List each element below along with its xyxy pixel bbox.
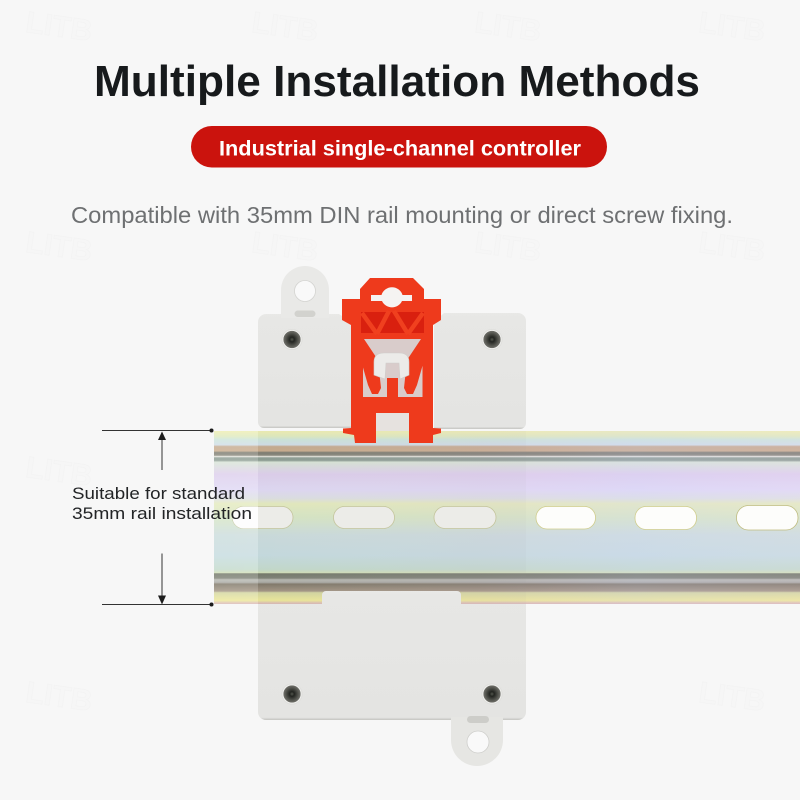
DIN rail [214, 431, 800, 604]
clip keyhole [371, 287, 412, 307]
dimension label: 35mm rail installation [72, 505, 252, 523]
badge: product type [191, 126, 607, 168]
clip white latch [374, 353, 409, 379]
rail slot 1 [232, 506, 293, 528]
badge: product type: Industrial single-channel controller [219, 136, 582, 160]
subtitle: Compatible with 35mm DIN rail mounting or direct screw fixing. [71, 202, 733, 228]
controller: lower housing [258, 591, 526, 766]
clip window [363, 339, 422, 397]
housing: upper left [258, 314, 351, 428]
watermark grid: LITB [24, 6, 94, 48]
rail slot 3 [434, 506, 496, 528]
watermark grid: LITB [24, 226, 94, 268]
clip spring arms [362, 339, 423, 398]
clip center opening [376, 413, 409, 431]
watermark grid: LITB [24, 676, 94, 718]
watermark grid: LITB [250, 6, 320, 48]
arrow: down [158, 554, 166, 604]
mounting ear: top [281, 266, 329, 318]
extension dot: top [210, 428, 214, 432]
screw: upper right [482, 329, 502, 350]
extension line: top [102, 430, 212, 432]
housing: lower body [258, 591, 526, 720]
watermark grid: LITB [697, 6, 767, 48]
title: Multiple Installation Methods [94, 57, 700, 106]
clip lattice band [361, 312, 424, 333]
watermark grid: LITB [697, 226, 767, 268]
watermark grid: LITB [697, 676, 767, 718]
controller: upper housing [258, 266, 526, 429]
screw: upper left [282, 329, 302, 350]
watermark grid: LITB [473, 226, 543, 268]
dimension label [72, 485, 252, 523]
rail slot 5 [635, 506, 696, 530]
housing: upper right [434, 313, 526, 429]
rail slot 6 [736, 506, 798, 530]
housing seen through rail [258, 431, 526, 604]
translucent edge of rail [214, 431, 258, 604]
mounting ear: bottom [451, 716, 503, 766]
watermark grid: LITB [24, 451, 94, 493]
watermark grid: LITB [250, 226, 320, 268]
dimension: 35mm rail height [102, 428, 214, 606]
extension dot: bottom [210, 602, 214, 606]
watermark grid: LITB [473, 6, 543, 48]
extension line: bottom [102, 604, 212, 606]
red DIN clip [342, 278, 441, 443]
clip body [342, 278, 441, 443]
rail slot 2 [334, 506, 394, 528]
rail slot 4 [536, 506, 596, 529]
dimension label: Suitable for standard [72, 485, 245, 503]
screw: lower right [482, 684, 502, 704]
arrow: up [158, 432, 166, 470]
clip lattice struts [362, 311, 423, 334]
screw: lower left [282, 684, 302, 704]
